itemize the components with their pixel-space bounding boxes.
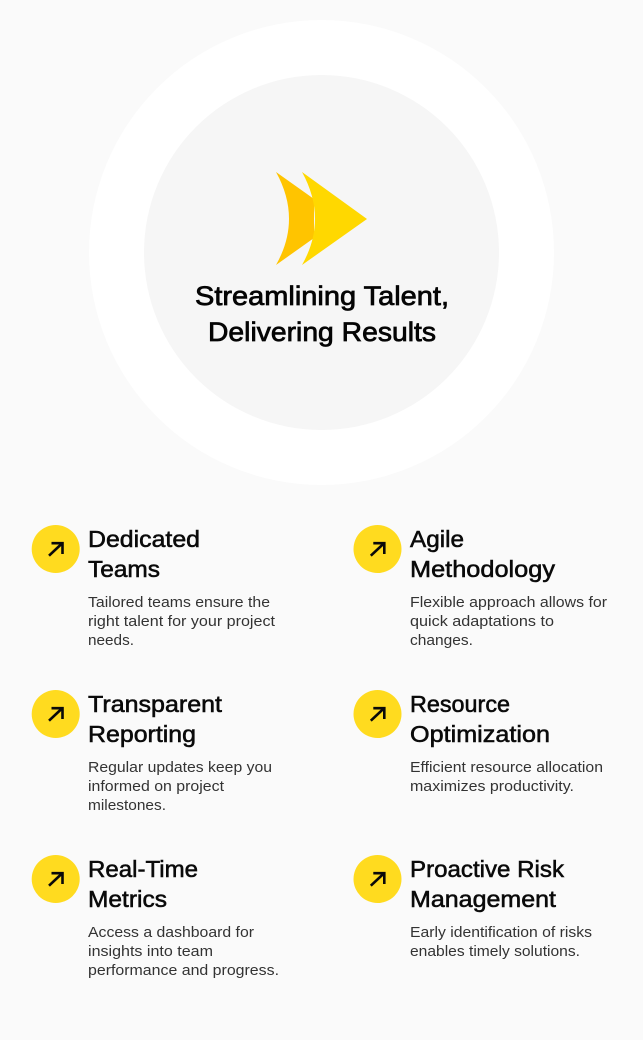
- description: Tailored teams ensure the: [88, 594, 270, 611]
- heading: Reporting: [88, 721, 196, 747]
- description: Efficient resource allocation: [410, 759, 603, 776]
- outer white circle: [89, 20, 554, 485]
- description: right talent for your project: [88, 613, 276, 630]
- heading: Dedicated: [88, 526, 200, 552]
- icon: arrow badge: [32, 525, 80, 573]
- icon: arrow badge: [32, 690, 80, 738]
- item: Real-Time Metrics: [32, 855, 279, 979]
- heading: Methodology: [410, 556, 556, 582]
- heading: Metrics: [88, 886, 167, 912]
- icon: arrow badge: [354, 690, 402, 738]
- description: quick adaptations to: [410, 613, 554, 630]
- item: Agile Methodology: [354, 525, 607, 649]
- description: Flexible approach allows for: [410, 594, 607, 611]
- heading: Agile: [410, 526, 464, 552]
- description: insights into team: [88, 943, 213, 960]
- icon: arrow badge: [32, 855, 80, 903]
- icon: arrow badge: [354, 525, 402, 573]
- description: Access a dashboard for: [88, 924, 254, 941]
- description: changes.: [410, 632, 473, 649]
- item: Dedicated Teams: [32, 525, 276, 649]
- heading: Optimization: [410, 721, 550, 747]
- description: maximizes productivity.: [410, 778, 574, 795]
- heading: Resource: [410, 691, 510, 717]
- item: Resource Optimization: [354, 690, 603, 795]
- heading: Real-Time: [88, 856, 198, 882]
- description: performance and progress.: [88, 962, 279, 979]
- icon: double yellow arrow logo: [276, 172, 367, 265]
- description: Early identification of risks: [410, 924, 592, 941]
- title: Streamlining Talent,: [195, 281, 449, 311]
- heading: Management: [410, 886, 557, 912]
- description: needs.: [88, 632, 134, 649]
- description: milestones.: [88, 797, 166, 814]
- hero: concentric circles with logo and title: [89, 20, 554, 485]
- description: Regular updates keep you: [88, 759, 272, 776]
- title: Delivering Results: [208, 317, 436, 347]
- heading: Proactive Risk: [410, 856, 565, 882]
- heading: Teams: [88, 556, 160, 582]
- heading: Transparent: [88, 691, 223, 717]
- description: enables timely solutions.: [410, 943, 580, 960]
- icon: arrow badge: [354, 855, 402, 903]
- item: Transparent Reporting: [32, 690, 272, 814]
- item: Proactive Risk Management: [354, 855, 592, 960]
- inner grey circle: [144, 75, 499, 430]
- description: informed on project: [88, 778, 225, 795]
